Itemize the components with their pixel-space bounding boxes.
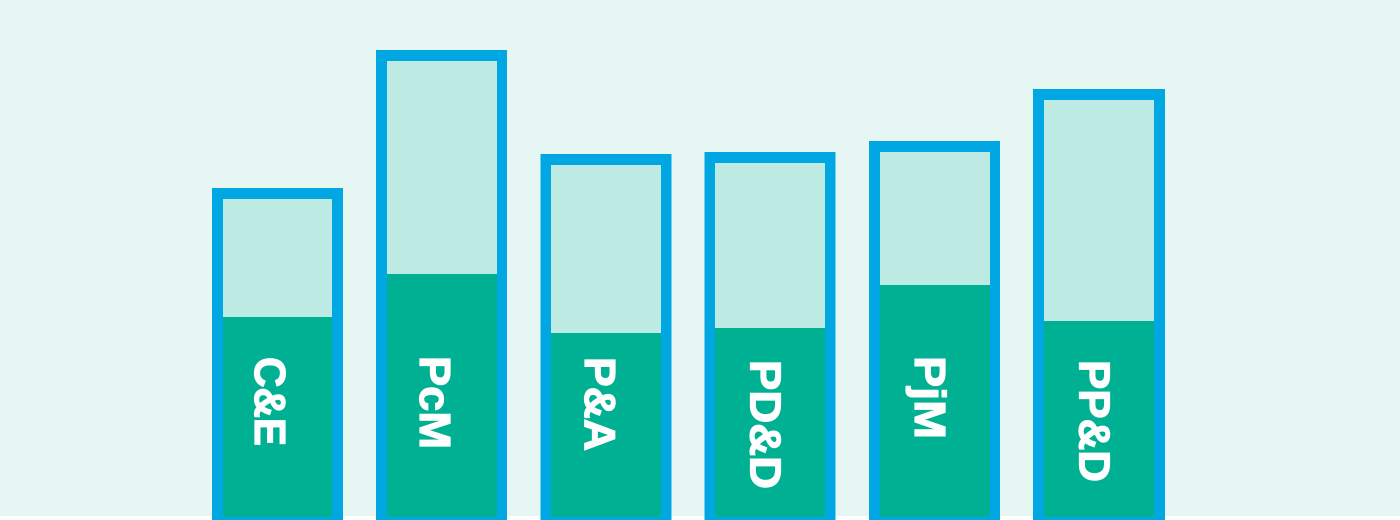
bar: P&A xyxy=(540,154,672,520)
label: PP&D: PP&D xyxy=(1070,360,1118,482)
bar: PD&D xyxy=(704,152,836,520)
label: PcM: PcM xyxy=(410,356,459,449)
label: C&E: C&E xyxy=(245,357,294,446)
label: PD&D: PD&D xyxy=(740,360,790,489)
bar: PjM xyxy=(869,141,1000,520)
label: PjM: PjM xyxy=(905,356,954,439)
bar: C&E xyxy=(212,188,343,520)
bar: PP&D xyxy=(1033,89,1165,520)
bar: PcM xyxy=(376,50,507,520)
label: P&A: P&A xyxy=(575,357,624,451)
